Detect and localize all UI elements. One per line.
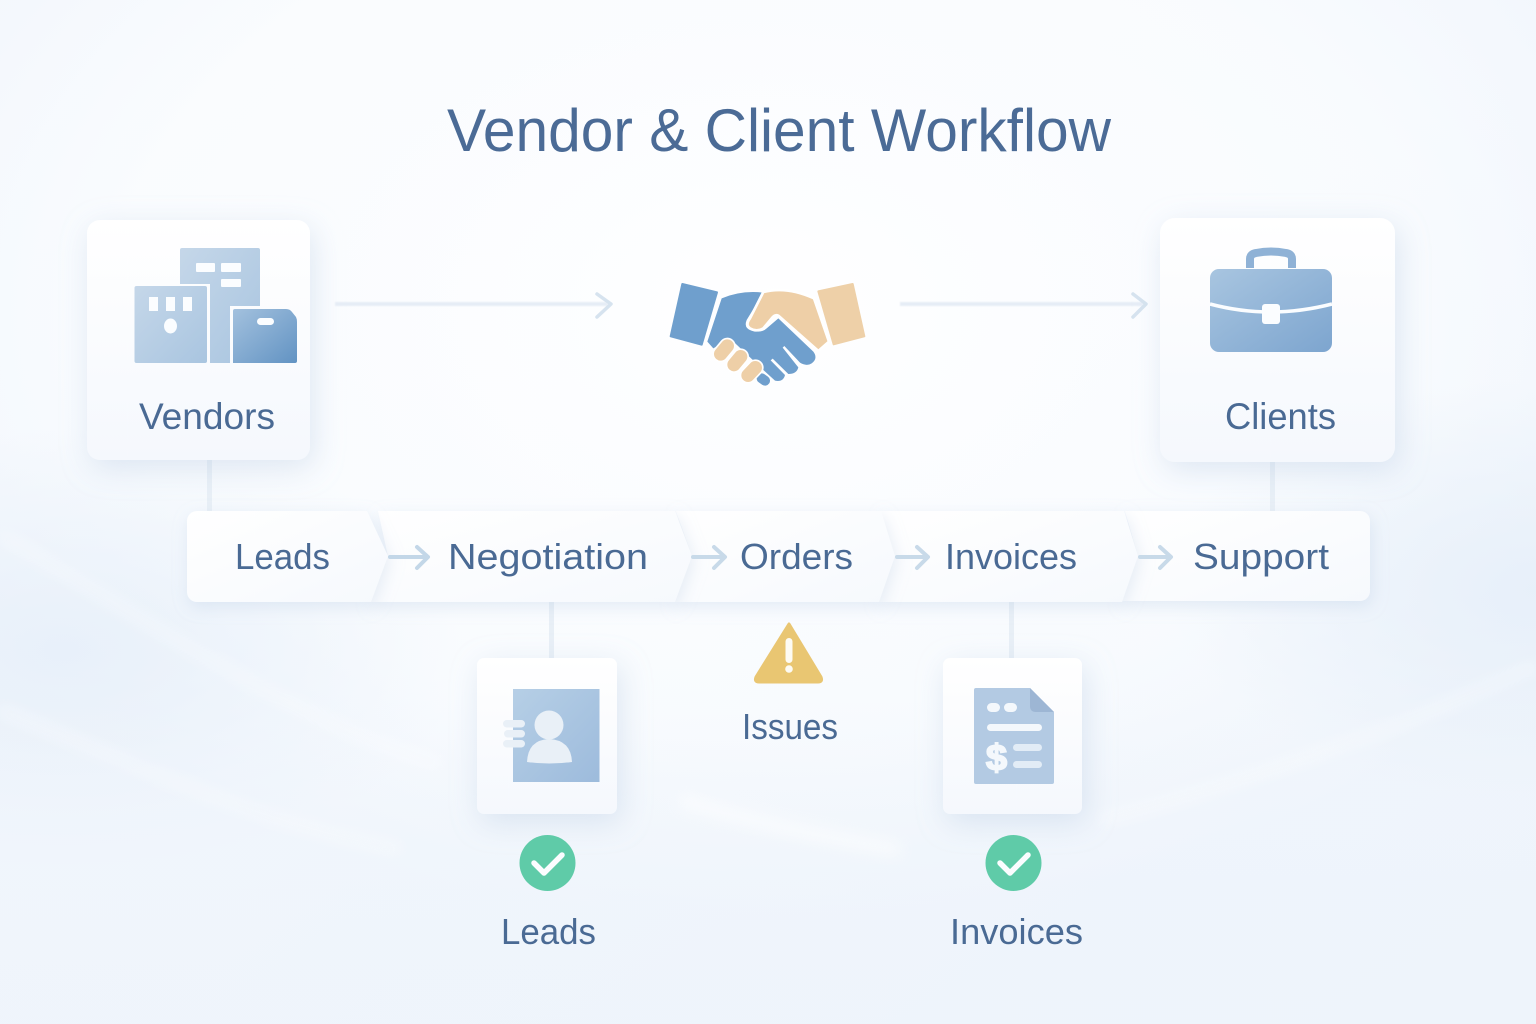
icon: invoice document: $: [986, 737, 1007, 778]
connector: invoices to invoices card: [1009, 600, 1014, 660]
step: support: Support: [1193, 536, 1329, 577]
arrow: orders to invoices: [897, 547, 928, 568]
icon: buildings and box: [134, 248, 297, 363]
icon: invoices check: [986, 835, 1042, 891]
icon: briefcase: [1210, 252, 1332, 352]
arrow: negotiation to orders: [693, 547, 725, 568]
arrow: leads to negotiation: [390, 547, 428, 568]
step: negotiation: [368, 511, 692, 602]
label: leads approved: Leads: [501, 911, 596, 952]
title: Vendor & Client Workflow: [447, 97, 1112, 164]
step: orders: Orders: [740, 536, 853, 577]
step: leads: [187, 511, 388, 602]
step: orders: [672, 511, 895, 602]
connector: clients to strip: [1270, 460, 1275, 512]
label: clients: Clients: [1225, 396, 1336, 437]
label: issues: Issues: [742, 706, 838, 747]
connector: negotiation to leads card: [549, 600, 554, 660]
connector: vendors to strip: [207, 458, 212, 512]
icon: warning: [755, 624, 822, 682]
step: invoices: [876, 511, 1138, 602]
panel: clients: [1160, 218, 1395, 462]
label: vendors: Vendors: [139, 396, 275, 437]
icon: invoice document: [974, 688, 1054, 784]
step: support: [1120, 511, 1370, 601]
step: negotiation: Negotiation: [448, 536, 648, 577]
panel: vendors: [87, 220, 310, 460]
icon: leads check: [520, 835, 576, 891]
icon: handshake: [671, 284, 864, 381]
arrow: vendors to handshake: [335, 294, 611, 317]
label: invoices approved: Invoices: [950, 911, 1083, 952]
step: leads: Leads: [235, 536, 330, 577]
arrow: invoices to support: [1140, 547, 1171, 568]
step: invoices: Invoices: [945, 536, 1077, 577]
arrow: handshake to clients: [900, 294, 1146, 317]
process strip: [187, 511, 1370, 602]
icon: contact book: [503, 689, 600, 782]
panel: leads card: [477, 658, 617, 814]
panel: invoices card: [943, 658, 1082, 814]
